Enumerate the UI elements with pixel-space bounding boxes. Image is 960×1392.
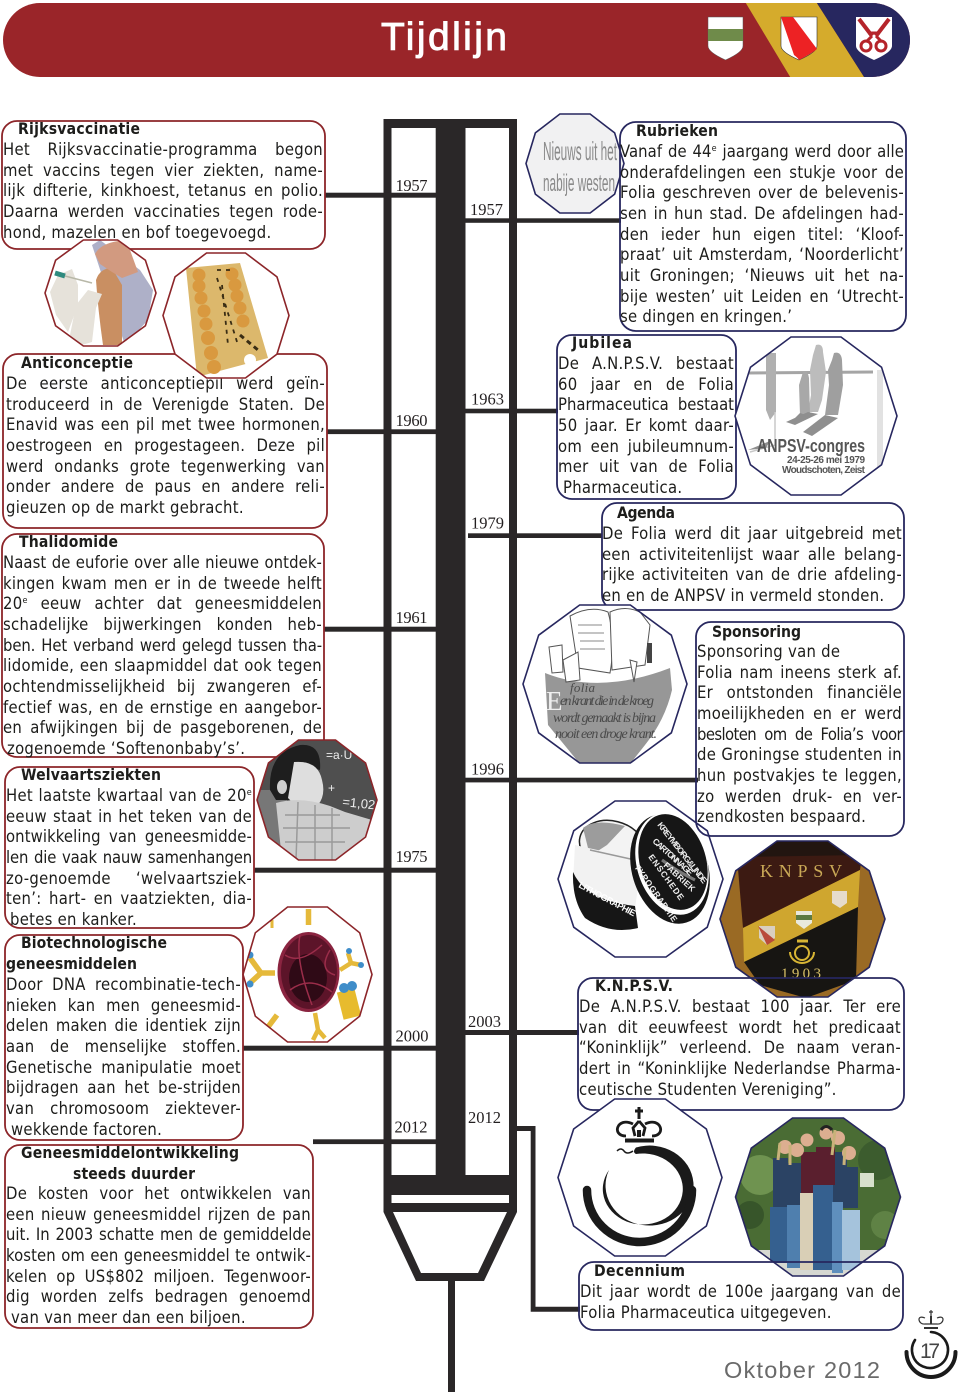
text: Jubilea: om een jubileumnum- <box>558 437 734 456</box>
image: cardboard box <box>558 801 723 958</box>
text: Thalidomide: ochtendmisselijkheid bij zwangeren ef- <box>3 677 322 696</box>
heading: Sponsoring: Sponsoring <box>712 623 801 641</box>
text: Sponsoring: zendkosten bespaard. <box>697 807 866 826</box>
image: Folia cartoon: E <box>546 686 562 716</box>
text: Welvaartsziekten: betes en kanker. <box>10 910 137 929</box>
text: Geneesmiddelontwikkeling: De kosten voor het ontwikkelen van <box>6 1184 311 1203</box>
year labels: 1975 <box>396 847 428 866</box>
text: Rubrieken: bije westen’ uit Leiden en ‘Utrecht- <box>620 287 904 306</box>
icon: crown <box>617 1107 661 1140</box>
panel: K.N.P.S.V. <box>578 977 904 1110</box>
text: Biotechnologische geneesmiddelen: bijdragen aan het be-strijden <box>6 1078 241 1097</box>
text: Thalidomide: zogenoemde ‘Softenonbaby’s’. <box>7 739 245 758</box>
text: Decennium: Dit jaar wordt de 100e jaargang van de <box>580 1282 901 1301</box>
panel: Geneesmiddelontwikkeling <box>5 1144 313 1329</box>
heading: Agenda: Agenda <box>617 504 675 522</box>
page number: 17 <box>920 1340 940 1363</box>
image: contraceptive pills <box>163 253 289 379</box>
text: Jubilea: mer uit van de Folia <box>558 457 734 476</box>
text: Thalidomide: 20e eeuw achter dat geneesmiddelen <box>3 594 322 613</box>
text: Sponsoring <box>697 641 902 829</box>
year labels: 1960 <box>396 411 428 430</box>
image: biotechnology cell <box>243 907 373 1043</box>
heading: Geneesmiddelontwikkeling steeds duurder <box>21 1144 239 1183</box>
year labels: 2012 <box>394 1118 428 1136</box>
text: Sponsoring: zo werden druk- en ver- <box>697 787 902 806</box>
heading: Rijksvaccinatie: Rijksvaccinatie <box>18 120 140 138</box>
image: vaccination <box>45 240 157 346</box>
text: Rijksvaccinatie: lijk difterie, kinkhoest, tetanus en polio. <box>3 181 323 200</box>
text: Rijksvaccinatie <box>3 139 323 244</box>
image: cardboard box: FABRIEK <box>662 860 698 894</box>
heading: Anticonceptie: Anticonceptie <box>21 354 133 372</box>
infographic page: Nieuws uit het <box>543 136 617 166</box>
text: Rubrieken: uit Groningen; ‘Nieuws uit het na- <box>620 266 904 285</box>
text: Geneesmiddelontwikkeling: dig worden zelfs bedragen genoemd <box>6 1287 311 1306</box>
text: Rubrieken: Vanaf de 44e jaargang werd door alle <box>620 142 904 161</box>
text: Rubrieken: Folia geschreven over de belevenis- <box>620 183 904 202</box>
text: Thalidomide: en afwijkingen bij de pasgeborenen, de <box>3 718 322 737</box>
image: cardboard box: ENSCHEDE <box>646 852 686 902</box>
text: Welvaartsziekten: ontwikkeling van geneesmidde- <box>6 827 252 846</box>
text: Sponsoring: hun postvakjes te leggen, <box>697 766 902 785</box>
year labels: 1957 <box>470 200 503 219</box>
year labels: 1996 <box>471 760 504 778</box>
image: ANPSV congres <box>735 337 897 495</box>
image: Folia cartoon <box>523 605 687 764</box>
icon: green shield <box>708 17 743 60</box>
year labels: 1963 <box>471 390 504 408</box>
text: Rubrieken: praat’ uit Amsterdam, ‘Noorderlicht’ <box>620 245 904 264</box>
text: Geneesmiddelontwikkeling: een nieuw geneesmiddel rijzen de pan <box>6 1205 311 1224</box>
icon: red shield <box>781 17 817 60</box>
text: Thalidomide: fectief was, en de ernstige en aangebor- <box>3 698 322 717</box>
image: KNPSV banner <box>720 841 885 998</box>
text: Biotechnologische geneesmiddelen: nieken kan men geneesmid- <box>6 996 241 1015</box>
image: boy at chalkboard: + <box>328 781 335 795</box>
text: Sponsoring: Er ontstonden financiële <box>697 683 902 702</box>
text: Rubrieken: se dingen en kringen.’ <box>620 307 792 326</box>
text: Agenda: De Folia werd dit jaar uitgebreid met <box>602 524 902 543</box>
text: Rijksvaccinatie: Het Rijksvaccinatie-programma begon <box>3 140 323 159</box>
text: Biotechnologische geneesmiddelen: aan de menselijke stoffen. <box>6 1037 241 1056</box>
text: Biotechnologische geneesmiddelen: Genetische manipulatie moet <box>6 1058 241 1077</box>
text: Anticonceptie: werd ondanks grote tegenwerking van <box>6 457 325 476</box>
header banner <box>3 3 910 77</box>
text: K.N.P.S.V. <box>579 996 901 1101</box>
text: Welvaartsziekten: eeuw staat in het teken van de <box>6 807 252 826</box>
heading: K.N.P.S.V.: K.N.P.S.V. <box>595 977 673 995</box>
text: Rijksvaccinatie: hond, mazelen en bof toegevoegd. <box>3 223 271 242</box>
heading: Welvaartsziekten: Welvaartsziekten <box>21 766 161 784</box>
image: KNPSV banner: 1903 <box>781 966 821 982</box>
image: Folia cartoon: folia <box>570 680 596 695</box>
text: Sponsoring: de Groningse studenten in <box>697 745 902 764</box>
panel: Thalidomide <box>2 533 324 760</box>
text: Sponsoring: Folia nam ineens sterk af. <box>697 663 902 682</box>
heading: Decennium: Decennium <box>594 1262 685 1280</box>
panel: Agenda <box>602 503 904 610</box>
image: boy at chalkboard <box>257 740 377 860</box>
heading: Biotechnologische geneesmiddelen <box>6 934 167 973</box>
text: K.N.P.S.V.: ceutische Studenten Vereniging”. <box>579 1080 837 1099</box>
text: Agenda: een activiteitenlijst waar alle belang- <box>602 545 902 564</box>
panel: Welvaartsziekten <box>5 766 254 931</box>
text: Rijksvaccinatie: Daarna werden vaccinaties tegen rode- <box>3 202 323 221</box>
image: boy at chalkboard: =a·U <box>326 748 352 762</box>
text: Biotechnologische geneesmiddelen: Door DNA recombinatie-tech- <box>6 975 241 994</box>
text: Rijksvaccinatie: met vaccins tegen vier ziekten, name- <box>3 161 323 180</box>
year labels: 1957 <box>396 176 428 195</box>
text: Jubilea: Pharmaceutica bestaat <box>558 395 734 414</box>
text: Jubilea <box>558 353 734 499</box>
text: Geneesmiddelontwikkeling: van van meer dan een biljoen. <box>11 1308 246 1327</box>
heading: Geneesmiddelontwikkeling steeds duurder: Geneesmiddelontwikkeling <box>21 1144 239 1162</box>
image: Folia cartoon: nooit een droge krant. <box>555 727 657 742</box>
heading: Rubrieken: Rubrieken <box>636 122 718 140</box>
image: ANPSV congres: 24-25-26 mei 1979 <box>787 455 865 466</box>
text: Thalidomide <box>3 552 322 760</box>
heading: Geneesmiddelontwikkeling steeds duurder: steeds duurder <box>73 1165 195 1183</box>
text: Thalidomide: Naast de euforie over alle nieuwe ontdek- <box>3 553 322 572</box>
text: Sponsoring: moeilijkheden en er werd <box>697 704 902 723</box>
text: Rubrieken: onderafdelingen een stukje voor de <box>620 163 904 182</box>
image: cardboard box: CARTONNAGE <box>651 836 695 878</box>
text: K.N.P.S.V.: “Koninklijk” verleend. De naam veran- <box>579 1038 901 1057</box>
syringe body <box>384 119 517 1392</box>
text: Geneesmiddelontwikkeling <box>6 1183 311 1329</box>
text: K.N.P.S.V.: dert in “Koninklijke Nederlandse Pharma- <box>579 1059 901 1078</box>
text: Biotechnologische geneesmiddelen: van chromosoom ziektever- <box>6 1099 241 1118</box>
right connectors <box>465 218 698 1312</box>
panel: Sponsoring <box>696 622 904 836</box>
text: Anticonceptie: gieuzen op de markt gebracht. <box>6 498 244 517</box>
panel: Decennium <box>579 1262 903 1330</box>
panel: Anticonceptie <box>3 354 327 528</box>
text: Anticonceptie: De eerste anticonceptiepil werd geïn- <box>6 374 325 393</box>
text: Thalidomide: lidomide, een slaapmiddel dat ook tegen <box>3 656 322 675</box>
text: K.N.P.S.V.: van dit eeuwfeest wordt het predicaat <box>579 1018 901 1037</box>
image: Nieuws uit het nabije westen: nabije westen <box>543 170 615 197</box>
text: Biotechnologische geneesmiddelen: wekkende factoren. <box>11 1120 162 1139</box>
plunger <box>436 128 466 1175</box>
syringe timeline <box>243 119 698 1392</box>
heading: Thalidomide: Thalidomide <box>19 533 118 551</box>
text: Jubilea: 60 jaar en de Folia <box>558 375 734 394</box>
text: Thalidomide: schadelijke bijwerkingen konden heb- <box>3 615 322 634</box>
text: Thalidomide: ben. Het verband werd gelegd tussen tha- <box>3 636 322 655</box>
year labels: 2000 <box>396 1026 428 1046</box>
image: group photo <box>735 1118 901 1276</box>
text: Rubrieken: sen in hun stad. De afdelingen had- <box>620 204 904 223</box>
heading: Jubilea: Jubilea <box>571 334 632 352</box>
panel: Rijksvaccinatie <box>2 120 325 249</box>
panel: Biotechnologische geneesmiddelen <box>5 934 243 1141</box>
year labels: 2003 <box>468 1012 501 1031</box>
year labels: 1961 <box>396 608 428 627</box>
text: Anticonceptie <box>6 373 325 519</box>
text: Welvaartsziekten: len die vaak nauw samenhangen <box>6 848 252 867</box>
text: Sponsoring: besloten om de Folia’s voor <box>697 725 902 744</box>
text: Geneesmiddelontwikkeling: kosten om een geneesmiddel te ontwik- <box>6 1246 311 1265</box>
image: Folia cartoon: wordt gemaakt is bijna <box>553 711 656 726</box>
text: Agenda: rijke activiteiten van de drie afdeling- <box>602 565 902 584</box>
icon: keys shield <box>856 17 892 60</box>
text: Geneesmiddelontwikkeling: kelen op US$802 miljoen. Tegenwoor- <box>6 1267 311 1286</box>
left connectors <box>243 193 436 1144</box>
year labels: 1979 <box>471 514 504 532</box>
text: Agenda <box>602 523 902 608</box>
year labels <box>394 176 504 1136</box>
image: Folia cartoon: en krant die in de kroeg <box>560 694 654 709</box>
page number logo <box>906 1310 956 1377</box>
text: Agenda: en en de ANPSV in vermeld stonden. <box>602 586 884 605</box>
image: cardboard box: TYPOGRAPHIE <box>632 862 680 924</box>
text: Welvaartsziekten: ten’: hart- en vaatziekten, dia- <box>6 889 252 908</box>
text: K.N.P.S.V.: De A.N.P.S.V. bestaat 100 jaar. Ter ere <box>579 997 901 1016</box>
title: Tijdlijn <box>381 16 507 59</box>
text: Anticonceptie: troduceerd in de Verenigde Staten. De <box>6 395 325 414</box>
text: Biotechnologische geneesmiddelen: delen maken die identiek zijn <box>6 1016 241 1035</box>
text: Thalidomide: kingen kwam men er in de tweede helft <box>3 574 322 593</box>
image: KNPSV banner: KNPSV <box>760 861 842 881</box>
text: Anticonceptie: oestrogeen en progestageen. Deze pil <box>6 436 325 455</box>
footer date: Oktober 2012 <box>724 1357 880 1383</box>
text: Jubilea: De A.N.P.S.V. bestaat <box>558 354 734 373</box>
text: Geneesmiddelontwikkeling: uit. In 2003 schatte men de gemiddelde <box>6 1225 311 1244</box>
text: Welvaartsziekten: Het laatste kwartaal van de 20e <box>6 786 252 805</box>
icon: small crown <box>919 1310 943 1328</box>
text: Sponsoring: Sponsoring van de <box>697 642 840 661</box>
image: Nieuws uit het nabije westen <box>526 114 624 214</box>
image: ANPSV congres: ANPSV-congres <box>757 436 865 456</box>
text: Rubrieken <box>620 141 904 329</box>
text: Welvaartsziekten <box>6 785 252 931</box>
text: Rubrieken: den ieder hun eigen titel: ‘Kloof- <box>620 225 904 244</box>
text: Jubilea: 50 jaar. Er komt daar- <box>558 416 734 435</box>
image: ANPSV congres: Woudschoten, Zeist <box>782 465 866 476</box>
year labels: 2012 <box>468 1108 501 1127</box>
text: Welvaartsziekten: zo-genoemde ‘welvaartsziek- <box>6 869 252 888</box>
icon: small rings <box>906 1332 956 1377</box>
text: Jubilea: Pharmaceutica. <box>563 478 682 497</box>
image: boy at chalkboard: =1,02 <box>342 794 376 812</box>
text: Anticonceptie: Enavid was een pil met twee hormonen, <box>6 415 325 434</box>
panel: Jubilea <box>557 334 736 499</box>
icon: serpent rings <box>587 1146 694 1242</box>
text: Decennium: Folia Pharmaceutica uitgegeven. <box>580 1303 832 1322</box>
heading: Biotechnologische geneesmiddelen: geneesmiddelen <box>6 955 137 973</box>
image: society logo <box>558 1099 722 1256</box>
image: cardboard box: LITHOGRAPHIE <box>577 880 637 918</box>
text: Anticonceptie: onder andere de paus en andere reli- <box>6 477 325 496</box>
text: Decennium <box>580 1281 901 1324</box>
image: cardboard box: KREYMBORG&LINDE <box>655 820 710 886</box>
text: Biotechnologische geneesmiddelen <box>6 974 241 1141</box>
panel: Rubrieken <box>620 122 906 331</box>
heading: Biotechnologische geneesmiddelen: Biotechnologische <box>21 934 167 952</box>
